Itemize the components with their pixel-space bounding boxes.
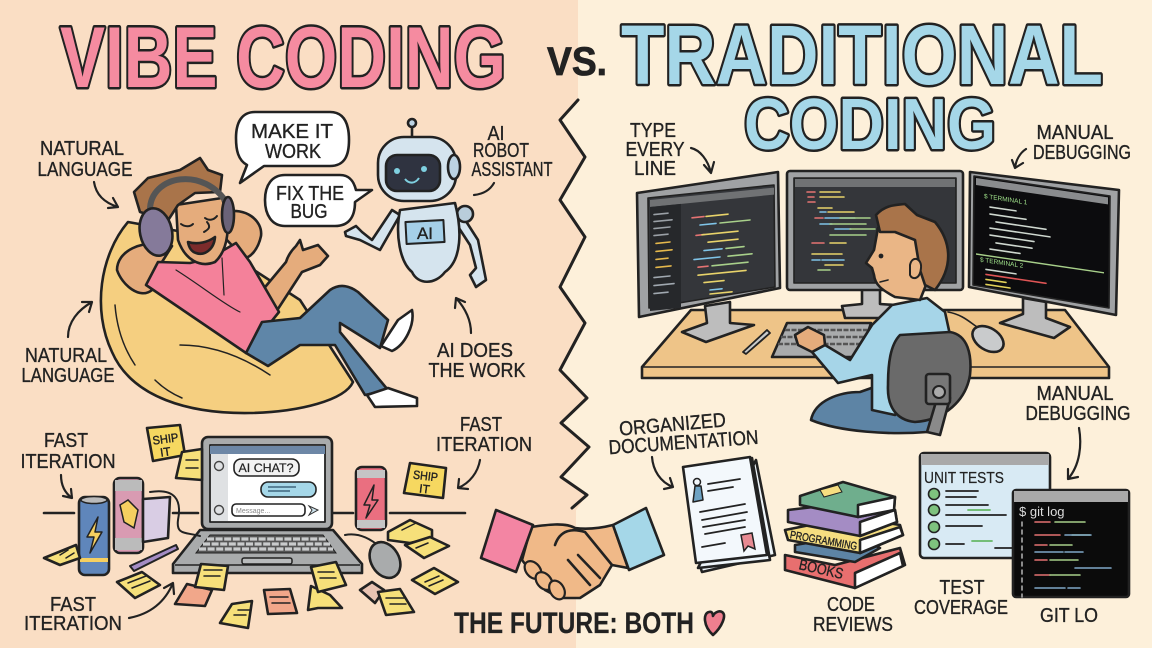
sticky note: ship it left: IT: [159, 444, 172, 460]
label: manual debugging bottom: [1026, 383, 1130, 479]
label: AI robot assistant: ASSISTANT: [472, 159, 552, 181]
illustration: desk setup: [637, 171, 1119, 435]
sticky note: ship it right: [404, 463, 446, 498]
label: organized documentation: [608, 409, 759, 489]
label: test coverage: COVERAGE: [914, 597, 1008, 619]
icon: heart: [705, 611, 724, 635]
handshake: [481, 508, 664, 602]
labels: natural language top: [38, 138, 132, 208]
label: AI robot assistant: ROBOT: [473, 140, 529, 162]
label: test coverage: TEST: [940, 577, 984, 599]
label: test coverage: [914, 577, 1008, 619]
label: type every line: [626, 120, 714, 180]
energy can: blue: [79, 496, 109, 575]
scattered sticky notes: [44, 449, 458, 628]
sticky note: ship it right: SHIP: [412, 468, 439, 485]
illustration: unit tests window: UNIT TESTS: [924, 470, 1004, 487]
labels: fast iteration left: [20, 430, 116, 498]
illustration: git log terminal: [1013, 490, 1129, 597]
man pants: [811, 385, 935, 433]
label: code reviews: [813, 594, 893, 636]
illustration: AI robot: AI: [417, 224, 433, 243]
speech bubble: fix the bug: BUG: [290, 201, 328, 223]
right monitor terminal: [976, 178, 1108, 302]
red book: [785, 548, 905, 588]
illustration: AI robot: [345, 119, 486, 287]
open mouth: [188, 237, 215, 254]
laptop base: [173, 530, 362, 573]
behind-head arm: [117, 244, 172, 293]
laptop screen: [210, 445, 325, 522]
left background: [0, 0, 589, 648]
left monitor code: [650, 188, 774, 311]
keyboard: [196, 535, 336, 553]
label: organized documentation: ORGANIZED: [618, 409, 727, 441]
energy can: red: [356, 467, 386, 530]
robot face screen: [386, 155, 440, 191]
robot chest label: [405, 220, 445, 244]
illustration: book stack: BOOKS: [797, 556, 845, 583]
man arm and shirt: [812, 298, 950, 415]
robot right arm: [455, 215, 486, 287]
labels: fast iteration right: [436, 414, 532, 489]
illustration: documents: [683, 457, 775, 572]
labels: fast iteration left: FAST: [44, 430, 88, 452]
labels: natural language bottom: LANGUAGE: [22, 365, 114, 387]
label: AI does the work: AI DOES: [437, 340, 513, 362]
illustration: laptop: Message...: [236, 508, 270, 515]
label: organized documentation: DOCUMENTATION: [608, 427, 759, 459]
message input: [232, 504, 305, 516]
label: type every line: LINE: [634, 158, 676, 180]
speech bubble: fix the bug: FIX THE: [276, 183, 344, 205]
blue jeans: [246, 286, 388, 395]
bookmark: [741, 533, 755, 551]
title: vibe coding: VIBE CODING: [60, 10, 506, 106]
text: the future both: THE FUTURE: BOTH: [454, 607, 694, 640]
label: type every line: TYPE: [630, 120, 676, 142]
monitor stands: [682, 302, 754, 342]
cable and mouse: [150, 491, 407, 583]
chat bubble: reply: [261, 482, 316, 497]
purple book: [788, 505, 897, 536]
beanbag: [101, 222, 353, 413]
labels: natural language top: NATURAL: [40, 138, 124, 160]
label: manual debugging bottom: MANUAL: [1036, 383, 1114, 405]
trackpad: [242, 558, 292, 564]
labels: natural language bottom: [22, 302, 114, 387]
label: manual debugging bottom: DEBUGGING: [1026, 403, 1130, 425]
illustration: book stack: [785, 482, 905, 588]
label: code reviews: REVIEWS: [813, 614, 893, 636]
illustration: git log terminal: $ git log: [1019, 504, 1065, 519]
labels: natural language bottom: NATURAL: [25, 345, 107, 367]
zigzag divider: [560, 100, 589, 508]
illustration: laptop: [173, 437, 362, 573]
labels: fast iteration bottom: [24, 583, 174, 635]
labels: fast iteration right: FAST: [460, 414, 502, 436]
hair: [134, 158, 222, 225]
label: type every line: EVERY: [626, 139, 684, 161]
blue cuff: [613, 508, 664, 570]
speech bubble: fix the bug: [265, 175, 372, 226]
keyboard: [772, 323, 871, 357]
green book: [800, 482, 895, 517]
label: AI does the work: THE WORK: [428, 360, 526, 382]
sticky note: ship it left: SHIP: [152, 430, 179, 448]
man hand: [795, 327, 825, 352]
center monitor code: [795, 179, 955, 270]
left monitor: [637, 172, 780, 317]
desk: [642, 310, 1109, 378]
sticky note: ship it right: IT: [418, 481, 431, 497]
right monitor: [969, 172, 1119, 315]
checks: [928, 488, 940, 550]
face: [176, 198, 228, 264]
labels: natural language top: LANGUAGE: [38, 159, 132, 181]
yellow book: [785, 517, 903, 553]
table line: [44, 512, 465, 514]
hands: [522, 524, 628, 598]
title: vs.: VS.: [547, 40, 607, 84]
purple pen: [130, 545, 178, 571]
illustration: laptop: AI CHAT?: [238, 461, 294, 475]
label: AI does the work: [428, 298, 526, 382]
label: manual debugging top: DEBUGGING: [1033, 142, 1131, 164]
man hair: [876, 204, 948, 290]
robot head: [378, 137, 456, 201]
label: git log: GIT LO: [1040, 605, 1098, 627]
right monitor terminal: $ TERMINAL 2: [980, 257, 1024, 270]
label: AI robot assistant: [472, 123, 552, 195]
right monitor terminal: $ TERMINAL 1: [984, 193, 1028, 207]
illustration: relaxed vibe coder on beanbag: [101, 158, 417, 413]
white shoes: [381, 310, 413, 351]
label: manual debugging top: [1012, 122, 1131, 168]
speech bubble: make it work: WORK: [265, 141, 322, 163]
chair: [888, 332, 970, 422]
fingers: [521, 558, 568, 602]
labels: fast iteration bottom: FAST: [50, 594, 96, 616]
illustration: book stack: PROGRAMMING: [789, 529, 858, 553]
illustration: unit tests window: [920, 453, 1050, 558]
front page: [683, 457, 767, 563]
labels: fast iteration bottom: ITERATION: [24, 613, 122, 635]
pink cuff: [481, 510, 533, 572]
man head: [866, 225, 930, 300]
label: code reviews: CODE: [827, 594, 875, 616]
raised forearm and hand: [256, 240, 328, 312]
laptop lid: [202, 437, 332, 529]
speech bubble: make it work: MAKE IT: [251, 121, 333, 143]
title: coding: CODING: [744, 85, 996, 165]
speech bubble: make it work: [236, 112, 349, 183]
label: AI robot assistant: AI: [488, 123, 504, 145]
pen: [743, 330, 770, 354]
energy can: pink: [114, 478, 143, 553]
mouse: [948, 312, 982, 330]
pink shirt: [146, 243, 279, 353]
labels: fast iteration left: ITERATION: [20, 451, 116, 473]
chat bubble: AI chat: [234, 459, 299, 476]
purple mug: [143, 497, 170, 542]
antenna: [411, 128, 413, 140]
robot left arm: [345, 210, 400, 250]
sticky note: ship it left: [147, 425, 185, 461]
center monitor: [787, 171, 963, 290]
headphones: [150, 179, 228, 210]
blue book: [795, 535, 880, 562]
robot body: [398, 203, 459, 282]
labels: fast iteration right: ITERATION: [436, 434, 532, 456]
label: manual debugging top: MANUAL: [1036, 122, 1114, 144]
